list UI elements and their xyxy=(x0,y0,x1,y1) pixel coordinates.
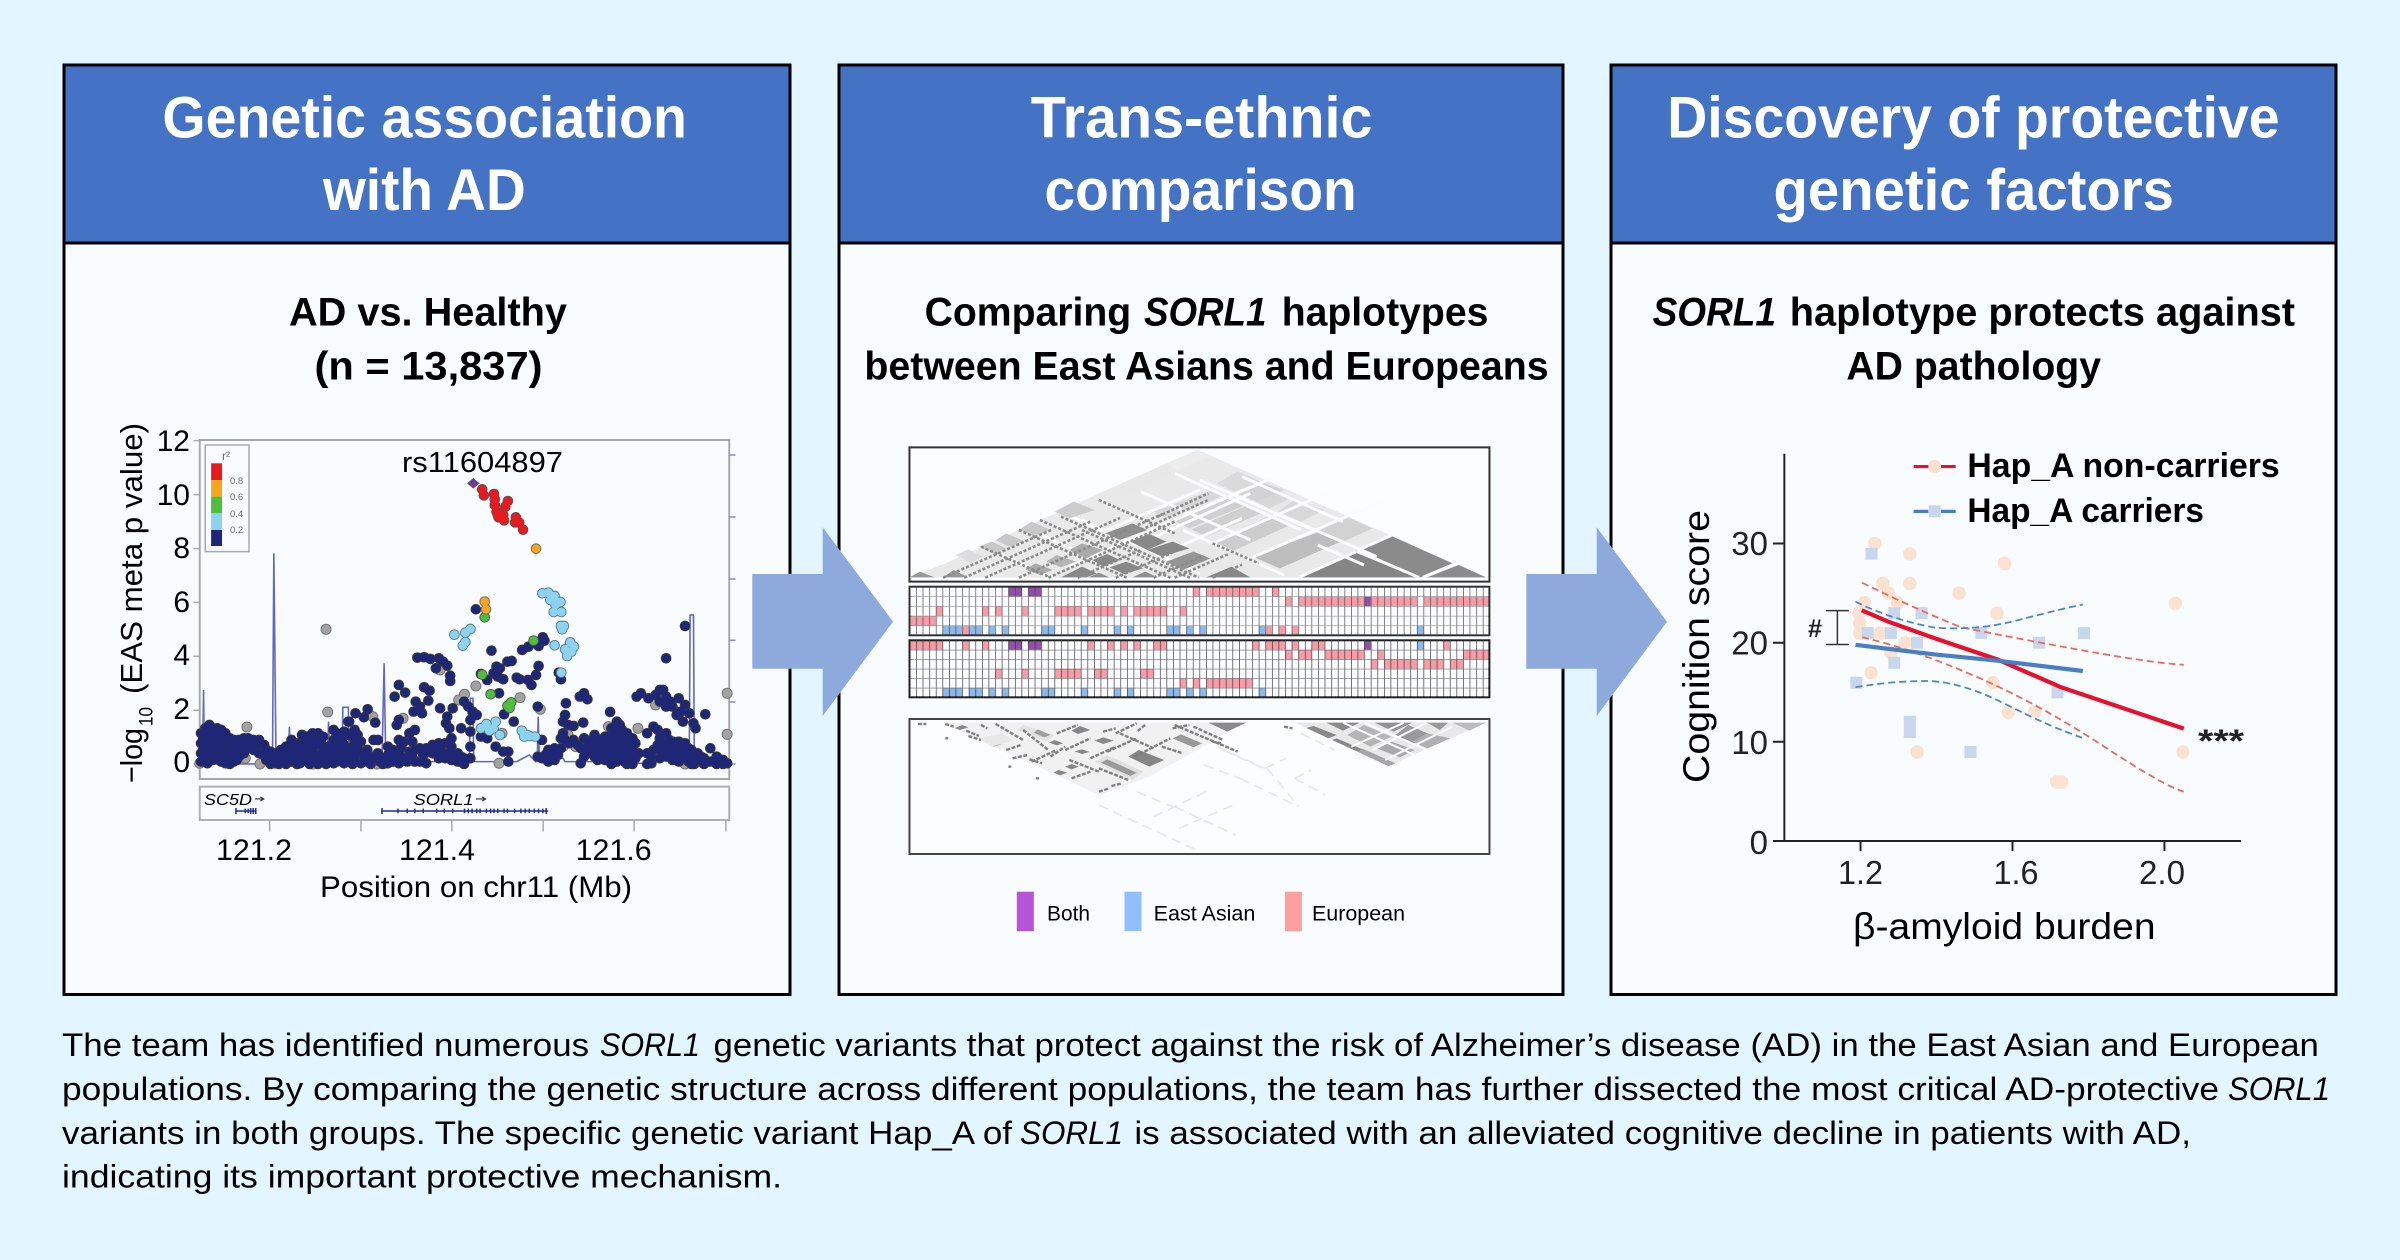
description paragraph: indicating its important protective mechanism. xyxy=(62,1158,782,1194)
y axis tick labels: 6 xyxy=(173,586,190,619)
significance markers: *** xyxy=(2198,723,2245,759)
description paragraph: genetic variants that protect against the risk of Alzheimer’s disease (AD) in the East Asian and European xyxy=(714,1027,2319,1063)
non-carrier points xyxy=(1859,467,2183,782)
subheading: haplotype protects: AD pathology xyxy=(1846,344,2102,388)
panel header: genetic association: Genetic association xyxy=(162,86,687,150)
y axis tick labels: 8 xyxy=(173,532,190,565)
description paragraph: SORL1 xyxy=(1020,1115,1123,1151)
legend: haplotype populations xyxy=(1017,892,1405,931)
panel header: trans-ethnic comparison: Trans-ethnic xyxy=(1031,86,1372,150)
haplotype grid: European xyxy=(910,640,1489,697)
navy SNP points xyxy=(201,609,727,764)
grey SNP points xyxy=(200,629,727,764)
legend line: non-carriers xyxy=(1914,465,1956,468)
y axis tick labels: 30 xyxy=(1731,525,1768,562)
panel header: genetic association xyxy=(64,65,790,243)
x axis tick labels: 2.0 xyxy=(2139,854,2185,891)
LD white gaps and dark marks xyxy=(1292,723,1452,767)
lead SNP label: rs11604897 xyxy=(402,447,563,479)
LD heatmap: European xyxy=(909,719,1489,854)
r2 legend labels: 0.6 xyxy=(230,492,243,503)
y axis tick labels: 10 xyxy=(1731,724,1768,761)
r2 legend labels: 0.4 xyxy=(230,509,243,520)
subheading: AD vs. Healthy: (n = 13,837) xyxy=(314,344,542,388)
lead SNP purple diamond xyxy=(468,479,479,488)
arrow: panel 2 to panel 3 xyxy=(1526,527,1667,716)
gene labels: SORL1 xyxy=(414,792,474,809)
significance bracket xyxy=(1826,611,1849,644)
description paragraph: is associated with an alleviated cognitive decline in patients with AD, xyxy=(1134,1115,2191,1151)
subheading: haplotype protects xyxy=(1653,291,2295,388)
gene track: SC5D xyxy=(236,808,257,814)
x axis tick labels: 1.6 xyxy=(1994,854,2038,891)
subheading: AD vs. Healthy xyxy=(289,291,568,388)
legend text xyxy=(1967,447,2280,530)
x axis tick labels: 121.4 xyxy=(399,834,475,867)
description paragraph: The team has identified numerous xyxy=(62,1027,589,1063)
y axis label: −log xyxy=(114,728,149,783)
x axis label: Position on chr11 (Mb) xyxy=(320,871,632,904)
x axis tick labels: 121.2 xyxy=(216,834,292,867)
y axis label: Cognition score xyxy=(1676,510,1717,783)
chart: regional association plot xyxy=(114,423,736,904)
r2 legend labels: r² xyxy=(222,449,230,463)
r2 legend labels: 0.2 xyxy=(230,525,243,536)
recombination rate line xyxy=(200,553,729,764)
legend: haplotype populations: European xyxy=(1312,902,1405,926)
panel header: trans-ethnic comparison xyxy=(839,65,1563,243)
panel: discovery of protective genetic factors xyxy=(1611,65,2336,994)
panel header: genetic association: with AD xyxy=(322,158,526,223)
y axis tick labels: 2 xyxy=(173,693,190,726)
LD lattice lines xyxy=(943,493,1259,578)
description paragraph: SORL1 xyxy=(2228,1071,2330,1107)
red SNP points xyxy=(482,489,523,530)
r2 legend color bar xyxy=(205,445,249,552)
panel header: discovery: genetic factors xyxy=(1774,158,2174,223)
subheading: AD vs. Healthy: AD vs. Healthy xyxy=(289,291,568,335)
panel header: trans-ethnic comparison: comparison xyxy=(1044,158,1357,223)
y axis tick labels: 0 xyxy=(1750,824,1768,861)
y axis label: 10 xyxy=(137,707,158,726)
subheading: comparing haplotypes: SORL1 xyxy=(1144,291,1266,335)
legend text: Hap_A non-carriers xyxy=(1967,447,2280,485)
legend: haplotype populations: East Asian xyxy=(1154,902,1255,926)
y axis tick labels: 10 xyxy=(157,479,190,512)
y axis tick labels: 0 xyxy=(173,746,190,779)
LD white gaps xyxy=(981,473,1457,577)
subheading: comparing haplotypes: haplotypes xyxy=(1282,291,1488,335)
panel: genetic association with AD xyxy=(64,65,790,994)
x axis tick labels xyxy=(216,834,652,867)
description paragraph: populations. By comparing the genetic structure across different populations, the team has further dissected the most critical AD-protective xyxy=(62,1071,2219,1107)
confidence band: carriers xyxy=(1856,602,2083,738)
description paragraph: SORL1 xyxy=(600,1027,700,1063)
r2 legend labels xyxy=(222,449,243,536)
x axis label: β-amyloid burden xyxy=(1853,906,2156,947)
y axis label: (EAS meta p value) xyxy=(114,423,149,694)
subheading: haplotype protects: SORL1 xyxy=(1653,291,1776,335)
light blue SNP points xyxy=(454,593,574,737)
gene labels xyxy=(204,792,474,809)
x axis ticks xyxy=(270,820,726,832)
gene direction arrows xyxy=(255,797,486,801)
y axis tick labels xyxy=(157,425,190,779)
panel header: discovery: Discovery of protective xyxy=(1667,86,2280,150)
haplotype grid: East Asian xyxy=(910,587,1489,635)
description paragraph: variants in both groups. The specific genetic variant Hap_A of xyxy=(62,1115,1012,1151)
significance markers: # xyxy=(1808,615,1822,643)
confidence band: non-carriers xyxy=(1862,583,2184,792)
legend text: Hap_A carriers xyxy=(1967,492,2204,530)
y axis label xyxy=(114,423,158,783)
plot frame and axes xyxy=(200,440,729,779)
gene track: SORL1 xyxy=(381,808,548,814)
y axis tick labels: 20 xyxy=(1731,624,1768,662)
y axis tick labels: 4 xyxy=(173,639,190,672)
r2 legend labels: 0.8 xyxy=(230,476,243,487)
panel: trans-ethnic comparison xyxy=(839,65,1563,994)
x axis tick labels: 121.6 xyxy=(576,834,652,867)
LD heatmap: East Asian xyxy=(909,447,1489,582)
subheading: comparing haplotypes: Comparing xyxy=(925,291,1131,335)
green SNP points xyxy=(482,617,534,708)
legend: haplotype populations: Both xyxy=(1047,902,1090,926)
chart: cognition vs amyloid scatter xyxy=(1676,447,2280,947)
axes xyxy=(1773,454,2241,851)
significance markers xyxy=(1808,615,2245,759)
subheading: haplotype protects: haplotype protects against xyxy=(1790,291,2295,335)
subheading: comparing haplotypes: between East Asians and Europeans xyxy=(864,344,1549,388)
gene track frame xyxy=(200,787,729,820)
orange SNP points xyxy=(485,549,536,609)
gene labels: SC5D xyxy=(204,792,252,809)
regression line: carriers xyxy=(1856,645,2083,671)
x axis tick labels xyxy=(1838,854,2185,891)
x axis tick labels: 1.2 xyxy=(1838,854,1883,891)
arrow: panel 1 to panel 2 xyxy=(752,527,893,716)
description paragraph xyxy=(62,1027,2330,1194)
y axis tick labels: 12 xyxy=(157,425,190,458)
y axis tick labels xyxy=(1731,525,1768,861)
regression line: non-carriers xyxy=(1862,610,2184,729)
subheading: comparing haplotypes xyxy=(864,291,1549,388)
carrier points xyxy=(1856,511,2084,752)
panel header: discovery xyxy=(1611,65,2336,243)
legend line: carriers xyxy=(1914,510,1956,513)
